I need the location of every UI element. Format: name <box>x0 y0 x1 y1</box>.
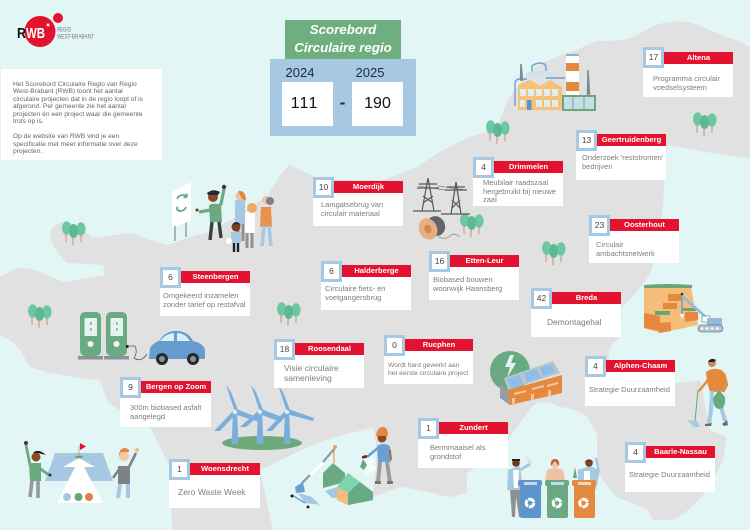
icon: cable reel <box>415 213 460 243</box>
card: Halderberge <box>321 261 411 310</box>
girl in white <box>245 203 257 248</box>
card: Halderberge: voetgangersbrug <box>325 293 381 302</box>
card: Steenbergen <box>160 267 250 316</box>
card: Geertruidenberg: 13 <box>582 135 591 145</box>
card: Etten-Leur: 16 <box>435 256 444 266</box>
person left with bottle <box>507 457 531 517</box>
card: Alphen-Chaam: Alphen-Chaam <box>614 361 667 370</box>
icon: wind turbines <box>214 385 314 450</box>
intro text panel: afgerond. Per gemeente zie het aantal <box>13 103 126 110</box>
card: Bergen op Zoom <box>120 377 211 427</box>
card: Rucphen: Rucphen <box>423 340 455 349</box>
card: Geertruidenberg <box>576 130 666 180</box>
card: Steenbergen: Omgekeerd inzamelen <box>163 291 238 300</box>
card: Etten-Leur: Biobased bouwen <box>433 275 493 284</box>
child <box>226 222 241 252</box>
card: Steenbergen: zonder tarief op restafval <box>163 300 246 309</box>
card: Drimmelen: hergebruikt bij nieuwe <box>483 187 556 196</box>
card: Rucphen: het eerste circulaire project <box>388 370 468 377</box>
trees west <box>28 304 52 328</box>
card: Breda <box>531 288 621 337</box>
logo: WEST-BRABANT <box>57 34 94 40</box>
card: Roosendaal: 18 <box>280 344 289 354</box>
icon: people group <box>196 185 274 252</box>
card: Geertruidenberg: bedrijven <box>582 162 612 171</box>
person left <box>24 441 52 498</box>
card: Alphen-Chaam: 4 <box>593 361 598 371</box>
card: Oosterhout: Circulair <box>596 240 624 249</box>
woman in orange <box>260 196 274 246</box>
person right <box>113 448 139 498</box>
card: Rucphen: Wordt hard gewerkt aan <box>388 362 459 369</box>
person centre <box>545 459 565 480</box>
card: Halderberge: Circulaire fiets- en <box>325 284 385 293</box>
card: Breda: Demontagehal <box>547 317 601 327</box>
card: Drimmelen: Meubilair raadszaal <box>483 178 548 187</box>
intro text panel: trots op is. <box>13 118 44 125</box>
trees near factory <box>486 120 510 144</box>
intro text panel: projecten én een project waar die gemeente <box>13 111 143 118</box>
card: Moerdijk: circulair materiaal <box>321 209 380 218</box>
icon: person with mop and bag <box>687 359 728 427</box>
trees near Breda <box>542 241 566 265</box>
card: Zundert: grondstof <box>430 452 461 461</box>
icon: power pylons <box>413 178 470 214</box>
card: Woensdrecht: 1 <box>177 464 182 474</box>
card: Oosterhout: ambachtsnetwerk <box>596 249 655 258</box>
card: Halderberge: Halderberge <box>354 266 399 275</box>
card: Altena: Altena <box>687 53 710 62</box>
card: Zundert: 1 <box>426 423 431 433</box>
trees by cable reel <box>460 213 484 237</box>
intro text panel: projecten. <box>13 148 42 155</box>
woman in blue <box>235 191 246 241</box>
card: Oosterhout: Oosterhout <box>624 220 665 229</box>
card: Altena: voedselsysteem <box>653 83 707 92</box>
card: Geertruidenberg: Geertruidenberg <box>602 135 661 144</box>
scoreboard title: Circulaire regio <box>294 40 392 55</box>
dash: - <box>340 93 345 112</box>
man pointing <box>196 185 226 240</box>
icon: houses, crane and builder <box>290 427 393 508</box>
intro text panel: Op de website van RWB vind je een <box>13 133 119 140</box>
card: Roosendaal: Visie circulaire <box>284 363 339 373</box>
card: Moerdijk: 10 <box>319 182 328 192</box>
intro text panel <box>1 69 162 160</box>
card: Zundert: Bermmaaisel als <box>430 443 485 452</box>
logo: WB <box>26 25 45 42</box>
logo <box>17 13 94 47</box>
card: Steenbergen: Steenbergen <box>192 272 238 281</box>
icon: solar building <box>490 351 562 405</box>
card: Bergen op Zoom: aangelegd <box>130 412 165 421</box>
card: Etten-Leur: woonwijk Haansberg <box>433 284 502 293</box>
score 2024 <box>282 82 333 126</box>
card: Drimmelen <box>473 157 563 206</box>
icon: excavator and earth block <box>644 284 723 333</box>
card: Moerdijk: Lamgatsebrug van <box>321 200 383 209</box>
card: Baarle-Nassau: Strategie Duurzaamheid <box>629 470 710 479</box>
icon: recycling bins with people <box>507 457 600 518</box>
card: Woensdrecht: Zero Waste Week <box>178 487 246 497</box>
scoreboard title: Scorebord <box>310 22 376 37</box>
year 2024: 2024 <box>286 65 314 80</box>
card: Zundert: Zundert <box>459 423 488 432</box>
card: Moerdijk <box>313 177 403 226</box>
builder <box>360 427 393 484</box>
card: Breda: Breda <box>576 293 597 302</box>
icon: blue car <box>149 331 205 365</box>
card: Bergen op Zoom: 300m biobased asfalt <box>130 403 201 412</box>
card: Alphen-Chaam: Strategie Duurzaamheid <box>589 385 670 394</box>
card: Geertruidenberg: Onderzoek 'reststromen' <box>582 153 663 162</box>
score 2025 <box>352 82 403 126</box>
card: Baarle-Nassau: 4 <box>633 447 638 457</box>
scoreboard <box>270 20 416 136</box>
trees near Hoeven <box>62 221 86 245</box>
card: Roosendaal <box>274 339 364 388</box>
card: Steenbergen: 6 <box>168 272 173 282</box>
trees north-east <box>693 112 717 136</box>
card: Roosendaal: samenleving <box>284 372 332 382</box>
intro text panel: circulaire projecten dat in de regio loopt of is <box>13 96 143 103</box>
icon: route arrow with two people <box>24 441 139 503</box>
trees centre <box>277 302 301 326</box>
scoreboard title <box>285 20 401 59</box>
scoreboard panel <box>270 59 416 136</box>
card: Baarle-Nassau: Baarle-Nassau <box>654 447 707 456</box>
score 2025: 190 <box>364 95 391 112</box>
card: Altena: Programma circulair <box>653 74 720 83</box>
card: Etten-Leur <box>429 251 519 300</box>
person right with bottle <box>573 458 600 490</box>
icon: charging stations <box>78 312 147 360</box>
card: Roosendaal: Roosendaal <box>308 344 351 353</box>
card: Alphen-Chaam <box>585 356 675 406</box>
card: Bergen op Zoom: 9 <box>128 382 133 392</box>
card: Breda: 42 <box>537 293 546 303</box>
card: Woensdrecht: Woensdrecht <box>201 464 249 473</box>
card: Oosterhout: 23 <box>595 220 604 230</box>
icon: factory <box>515 54 595 110</box>
card: Drimmelen: 4 <box>481 162 486 172</box>
card: Altena <box>643 47 733 97</box>
card: Zundert <box>418 418 508 468</box>
year 2025: 2025 <box>356 65 384 80</box>
card: Oosterhout <box>589 215 679 263</box>
card: Rucphen <box>384 335 473 384</box>
icon: recycle symbols <box>526 499 587 507</box>
card: Drimmelen: zaal <box>483 195 497 204</box>
card: Moerdijk: Moerdijk <box>353 182 384 191</box>
intro text panel: specificatie met meer informatie over deze <box>13 141 138 148</box>
intro text panel: Het Scorebord Circulaire Regio van Regio <box>13 81 137 88</box>
card: Etten-Leur: Etten-Leur <box>466 256 503 265</box>
logo: REGIO <box>57 26 71 34</box>
card: Drimmelen: Drimmelen <box>509 162 548 171</box>
icon: whiteboard with recycle arrows <box>172 182 191 241</box>
card: Bergen op Zoom: Bergen op Zoom <box>146 382 206 391</box>
intro text panel: West-Brabant (RWB) toont het aantal <box>13 88 123 95</box>
card: Baarle-Nassau <box>625 442 715 492</box>
card: Halderberge: 6 <box>329 266 334 276</box>
score 2024: 111 <box>291 95 317 112</box>
card: Altena: 17 <box>649 52 658 62</box>
card: Rucphen: 0 <box>392 340 397 350</box>
card: Woensdrecht <box>169 459 260 508</box>
logo: R <box>17 25 26 42</box>
